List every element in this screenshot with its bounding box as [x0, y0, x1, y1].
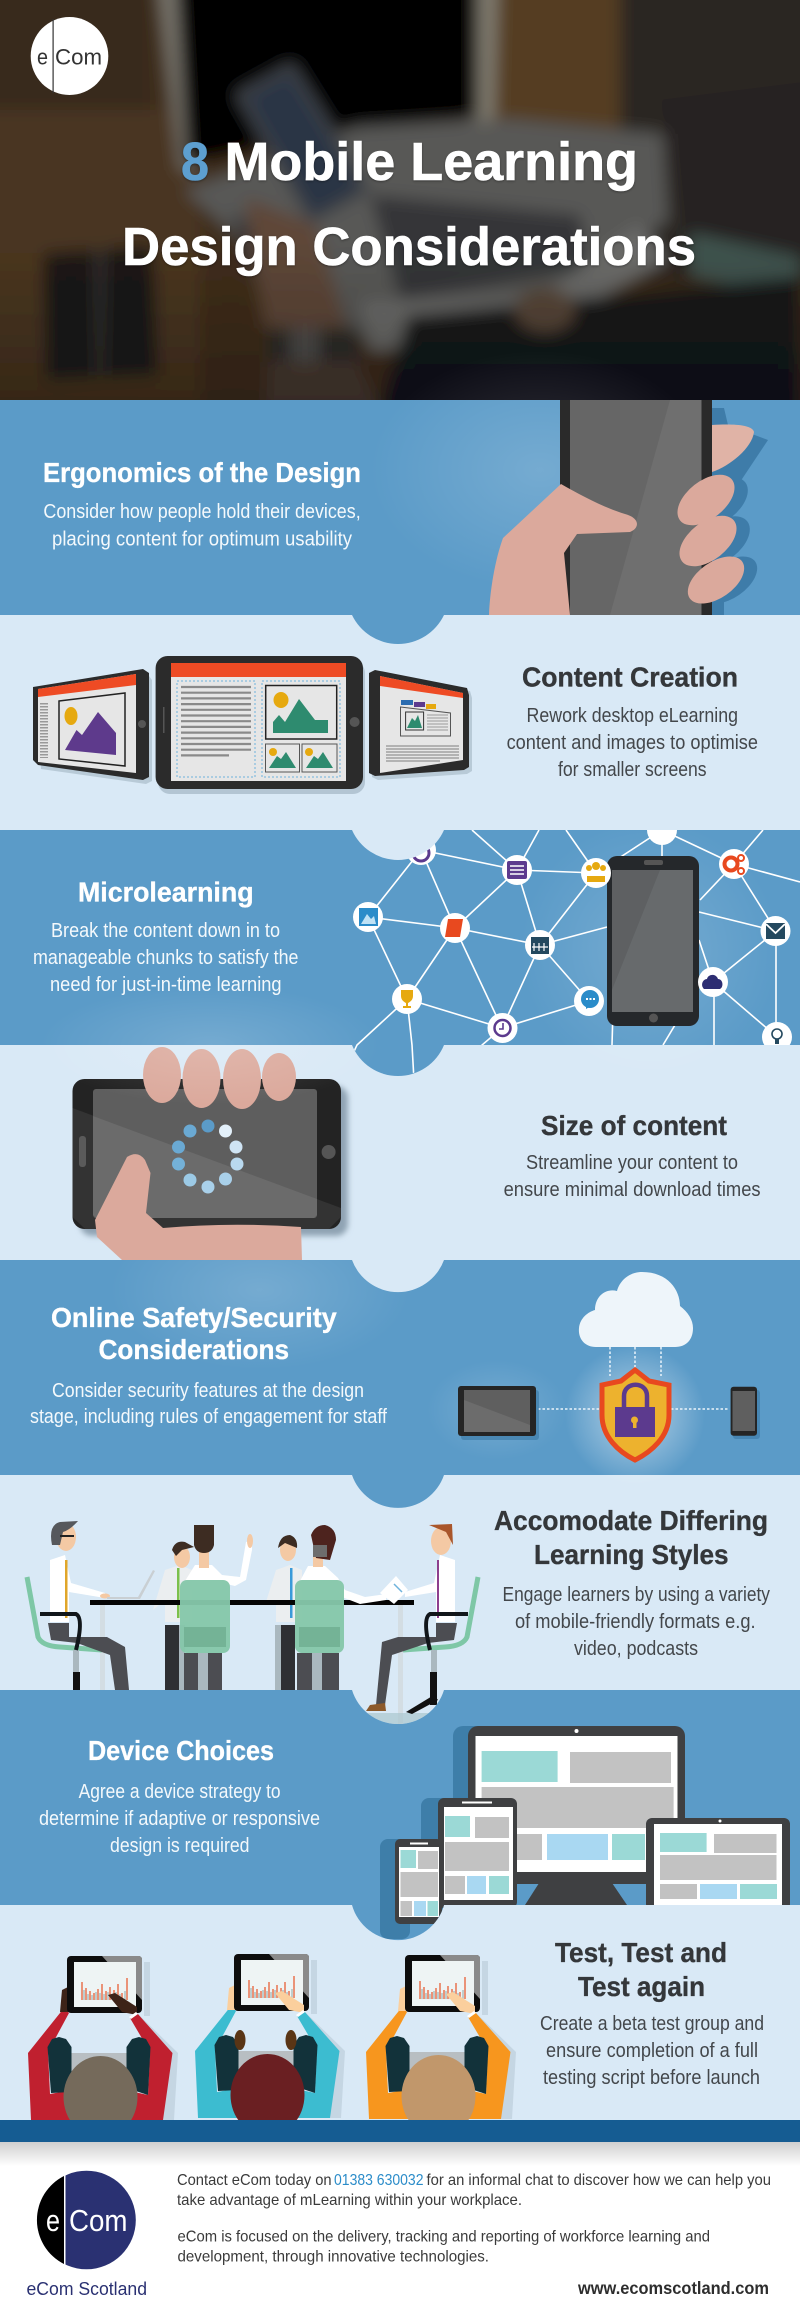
body text: microlearning: [33, 920, 298, 996]
logo: eCom white: [31, 17, 108, 95]
illustration: meeting around a table: [27, 1521, 478, 1725]
heading: device choices: Device Choices: [88, 1735, 274, 1766]
panel: size of content: [0, 1045, 800, 1292]
heading: online safety: Considerations: [98, 1334, 289, 1365]
heading: ergonomics: Ergonomics of the Design: [43, 457, 361, 488]
person back left: [180, 1525, 253, 1690]
panel: device choices: [0, 1690, 800, 1940]
icon: centre tablet: [156, 656, 365, 794]
logo: eCom colour: e: [46, 2203, 60, 2238]
icon: fingers: [668, 465, 753, 613]
panel: ergonomics: [0, 350, 800, 644]
logo: eCom colour: Com: [69, 2203, 128, 2238]
icon: cloud: [579, 1272, 693, 1347]
contact text: for an informal chat to discover how we can help you: [426, 2172, 771, 2189]
panel: content creation: [0, 615, 800, 860]
body text: microlearning: need for just-in-time learning: [50, 974, 282, 996]
icon: thumb and palm: [95, 1154, 302, 1260]
contact text: [177, 2172, 771, 2209]
illustration: three tablets: [33, 656, 472, 794]
footer panel: [0, 2142, 800, 2320]
body text: learning styles: video, podcasts: [574, 1638, 698, 1660]
body text: online safety: stage, including rules of engagement for staff: [30, 1406, 387, 1428]
icon: tablet: [458, 1386, 539, 1440]
body text: test: [540, 2013, 764, 2089]
body text: test: testing script before launch: [543, 2067, 760, 2089]
icon: shield with lock: [602, 1370, 669, 1460]
icon: thumb and palm: [489, 484, 637, 615]
body text: device choices: design is required: [110, 1835, 250, 1857]
body text: online safety: Consider security features at the design: [52, 1380, 364, 1402]
table: [90, 1600, 414, 1605]
illustration: security: [427, 1272, 760, 1485]
heading: learning styles: Accomodate Differing: [494, 1505, 768, 1536]
about text: development, through innovative technologies.: [178, 2249, 489, 2266]
footer band: [0, 2120, 800, 2142]
illustration: hand holding phone: [489, 400, 768, 615]
body text: ergonomics: placing content for optimum usability: [52, 529, 352, 551]
heading: test: Test, Test and: [555, 1937, 727, 1968]
icon: right tablet: [369, 670, 472, 780]
icon: loading spinner: [172, 1120, 244, 1194]
body text: device choices: [39, 1781, 320, 1857]
body text: content creation: [507, 705, 758, 781]
website: www.ecomscotland.com: [577, 2278, 769, 2298]
heading: test: Test again: [578, 1971, 705, 2002]
logo: eCom colour: [37, 2171, 136, 2269]
person right: [366, 1524, 478, 1714]
logo caption: eCom Scotland: [26, 2278, 147, 2299]
title: 8: [181, 132, 209, 192]
panel: learning styles: [0, 1475, 800, 1725]
person behind left: [153, 1542, 194, 1690]
person left: [27, 1521, 129, 1690]
icon: phone: [731, 1387, 760, 1439]
illustration: content network: [350, 815, 800, 1080]
title: Mobile Learning: [224, 132, 638, 192]
paper: [380, 1576, 408, 1604]
heading: learning styles: [494, 1505, 768, 1570]
icon: fingers: [143, 1047, 296, 1109]
contact text: 01383 630032: [334, 2172, 424, 2189]
body text: content creation: Rework desktop eLearning: [526, 705, 738, 727]
body text: learning styles: of mobile-friendly formats e.g.: [515, 1611, 756, 1633]
body text: content creation: for smaller screens: [558, 759, 707, 781]
body text: microlearning: Break the content down in to: [51, 920, 280, 942]
body text: size of content: ensure minimal download times: [504, 1179, 761, 1201]
icon: left tablet: [33, 669, 152, 784]
panel: online safety: [0, 1210, 800, 1508]
heading: microlearning: Microlearning: [78, 877, 254, 908]
body text: learning styles: [502, 1584, 770, 1660]
about text: [178, 2229, 710, 2266]
title: Design Considerations: [122, 217, 696, 277]
illustration: tablet with spinner: [72, 1047, 348, 1260]
heading: content creation: Content Creation: [522, 662, 738, 693]
title: [122, 132, 696, 277]
logo: eCom white: Com: [55, 44, 102, 70]
panel: microlearning: [0, 830, 800, 1089]
body text: content creation: content and images to optimise: [507, 732, 758, 754]
heading: test: [555, 1937, 727, 2002]
body text: ergonomics: Consider how people hold their devices,: [43, 501, 361, 523]
contact text: Contact eCom today on: [177, 2172, 332, 2189]
body text: size of content: [504, 1152, 761, 1201]
illustration: three people using tablets: [28, 1954, 516, 2138]
body text: size of content: Streamline your content to: [526, 1152, 738, 1174]
body text: ergonomics: [43, 501, 361, 551]
body text: test: Create a beta test group and: [540, 2013, 764, 2035]
laptop: [107, 1570, 155, 1599]
logo: eCom white: e: [37, 44, 48, 70]
about text: eCom is focused on the delivery, tracking and reporting of workforce learning and: [178, 2229, 710, 2246]
person behind right: [265, 1535, 302, 1690]
heading: size of content: Size of content: [541, 1110, 727, 1141]
body text: device choices: Agree a device strategy to: [79, 1781, 281, 1803]
body text: microlearning: manageable chunks to satisfy the: [33, 947, 298, 969]
header photo background: [0, 0, 800, 420]
person back right: [295, 1525, 386, 1690]
icon: phone: [607, 856, 699, 1026]
illustration: responsive devices: [380, 1726, 790, 1939]
body text: online safety: [30, 1380, 387, 1428]
icon: phone: [560, 400, 712, 615]
body text: test: ensure completion of a full: [546, 2040, 758, 2062]
body text: device choices: determine if adaptive or responsive: [39, 1808, 320, 1830]
network nodes: [353, 815, 792, 1052]
heading: online safety: [51, 1302, 337, 1365]
contact text: take advantage of mLearning within your workplace.: [177, 2192, 522, 2209]
panel: test, test and test again: [0, 1905, 800, 2138]
heading: online safety: Online Safety/Security: [51, 1302, 337, 1333]
icon: finger shadows: [683, 408, 768, 615]
heading: learning styles: Learning Styles: [534, 1539, 729, 1570]
